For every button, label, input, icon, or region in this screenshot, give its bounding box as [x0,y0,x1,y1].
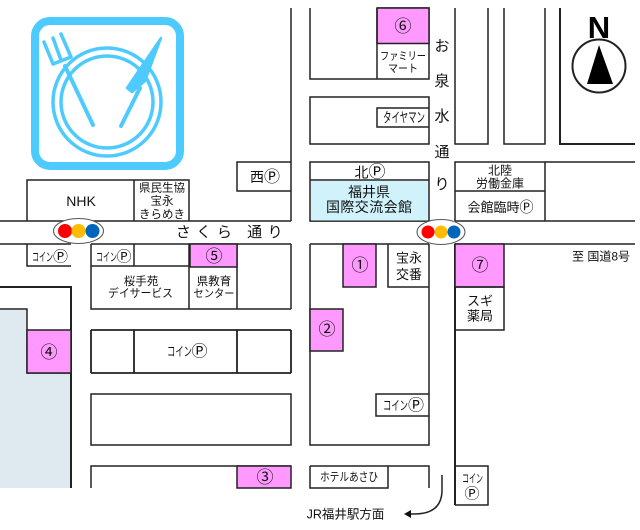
road label: Oizumi-dori: 水 [434,108,450,125]
north parking: 北Ⓟ [354,162,386,182]
Sakuratekoen day service: 桜手苑 [124,274,159,288]
coin parking bottom right: Ⓟ [464,486,480,502]
Taiyaman [377,108,429,127]
marker 6: ⑥ [394,17,412,36]
marker 1: ① [352,256,368,275]
coin parking center right [376,394,429,416]
coin parking left [27,244,71,266]
FamilyMart: マート [388,63,418,75]
marker 5 [190,244,237,267]
west parking: 西Ⓟ [250,168,280,186]
road label: Sakura-dori: さくら 通り [176,224,288,241]
coin parking second: Ⓟ [116,248,132,266]
panel: international exchange hall: 国際交流会館 [326,199,412,215]
NHK building: NHK [66,193,96,209]
FamilyMart: ファミリー [380,50,426,62]
coin parking bottom right [455,466,488,505]
coin parking left: コイン [32,250,53,264]
police box: 宝永 [396,250,422,266]
marker 7: ⑦ [472,256,488,275]
coin parking center right: コイン [383,398,408,413]
Hokuriku labor bank: 北陸 [488,164,512,178]
north compass [572,10,626,92]
Hotel Asahi: ホテルあさひ [320,470,378,484]
marker 2 [310,309,343,351]
co-op label: きらめき [139,208,185,221]
Sugi pharmacy [455,287,504,330]
prefectural education center [194,274,234,300]
marker 7 [455,244,504,287]
traffic light left [54,218,104,244]
arrow to JR station [404,475,442,518]
Sugi pharmacy: 薬局 [467,308,493,324]
Sakuratekoen day service [108,244,189,309]
FamilyMart [377,8,426,79]
west parking [237,162,291,191]
coin parking second [91,244,190,266]
marker 2: ② [318,320,336,339]
panel: international exchange hall [311,181,428,220]
NHK building [27,180,189,221]
Hokuriku labor bank: 労働金庫 [476,176,524,190]
road label: Oizumi-dori: 泉 [434,73,450,90]
icon: restaurant plate with fork and knife [35,21,180,166]
marker 5: ⑤ [206,247,222,266]
Sugi pharmacy: スギ [467,294,493,308]
co-op label: 県民生協 [139,180,185,194]
marker 3: ③ [256,468,274,487]
coin parking second: コイン [96,250,117,264]
panel: international exchange hall: 福井県 [348,184,390,200]
Hotel Asahi [310,466,388,488]
prefectural education center: 県教育 [197,274,231,288]
coin parking center right: Ⓟ [408,396,424,414]
to route 8: 至 国道8号 [572,250,630,264]
hall temporary parking: 会館臨時Ⓟ [467,199,534,215]
co-op label [139,180,185,221]
road label: Oizumi-dori: り [434,176,450,193]
direction label: JR Fukui Station: JR福井駅方面 [307,506,384,522]
marker 4: ④ [40,343,58,362]
Taiyaman: タイヤマン [383,110,425,126]
Sakuratekoen day service: デイサービス [108,286,173,300]
road label: Oizumi-dori: お [434,38,450,55]
police box [388,244,429,287]
traffic light right [417,220,465,244]
panel: grey-blue area [0,310,70,488]
coin parking middle: コイン [167,344,192,359]
Hokuriku labor bank [476,164,524,190]
road label: Oizumi-dori: 通 [434,144,450,161]
coin parking left: Ⓟ [53,248,68,266]
marker 4 [27,330,71,373]
co-op label: 宝永 [150,194,174,208]
coin parking middle: Ⓟ [191,342,208,360]
outline of grey-blue area [0,309,71,373]
marker 1 [343,244,376,287]
prefectural education center: センター [194,287,234,300]
police box: 交番 [396,267,422,282]
north compass: N [588,10,610,45]
road label: Oizumi-dori [434,38,450,193]
coin parking bottom right: コイン [462,472,483,486]
marker 6 [377,8,429,44]
marker 3 [237,466,291,488]
